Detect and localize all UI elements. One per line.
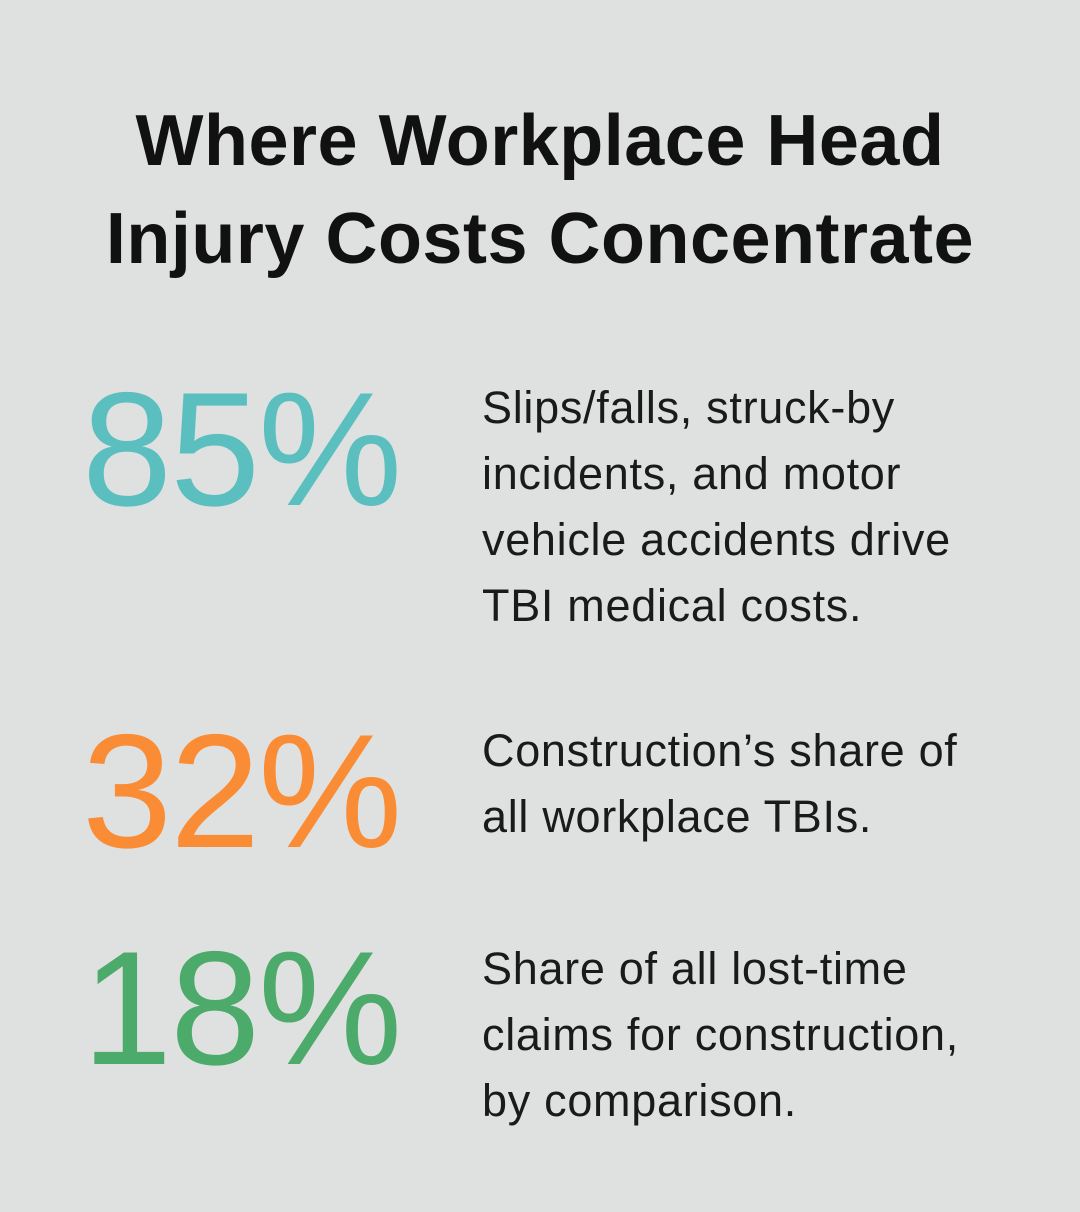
text: 32% description: all workplace TBIs. (482, 791, 872, 842)
stat: 18%: 18% (82, 918, 400, 1099)
title: Where Workplace Head (136, 101, 944, 181)
text: 18% description: by comparison. (482, 1075, 797, 1126)
text: 18% description (482, 943, 959, 1126)
stat: 32%: 32% (82, 701, 400, 882)
text: 32% description: Construction’s share of (482, 725, 958, 776)
text: 18% description: Share of all lost-time (482, 943, 908, 994)
title: Injury Costs Concentrate (106, 199, 974, 279)
title (106, 101, 974, 279)
text: 18% description: claims for construction, (482, 1009, 959, 1060)
text: 85% description (482, 382, 951, 631)
stat: 85%: 85% (82, 359, 400, 540)
text: 85% description: TBI medical costs. (482, 580, 862, 631)
text: 85% description: incidents, and motor (482, 448, 901, 499)
text: 32% description (482, 725, 958, 842)
text: 85% description: Slips/falls, struck-by (482, 382, 895, 433)
text: 85% description: vehicle accidents drive (482, 514, 951, 565)
